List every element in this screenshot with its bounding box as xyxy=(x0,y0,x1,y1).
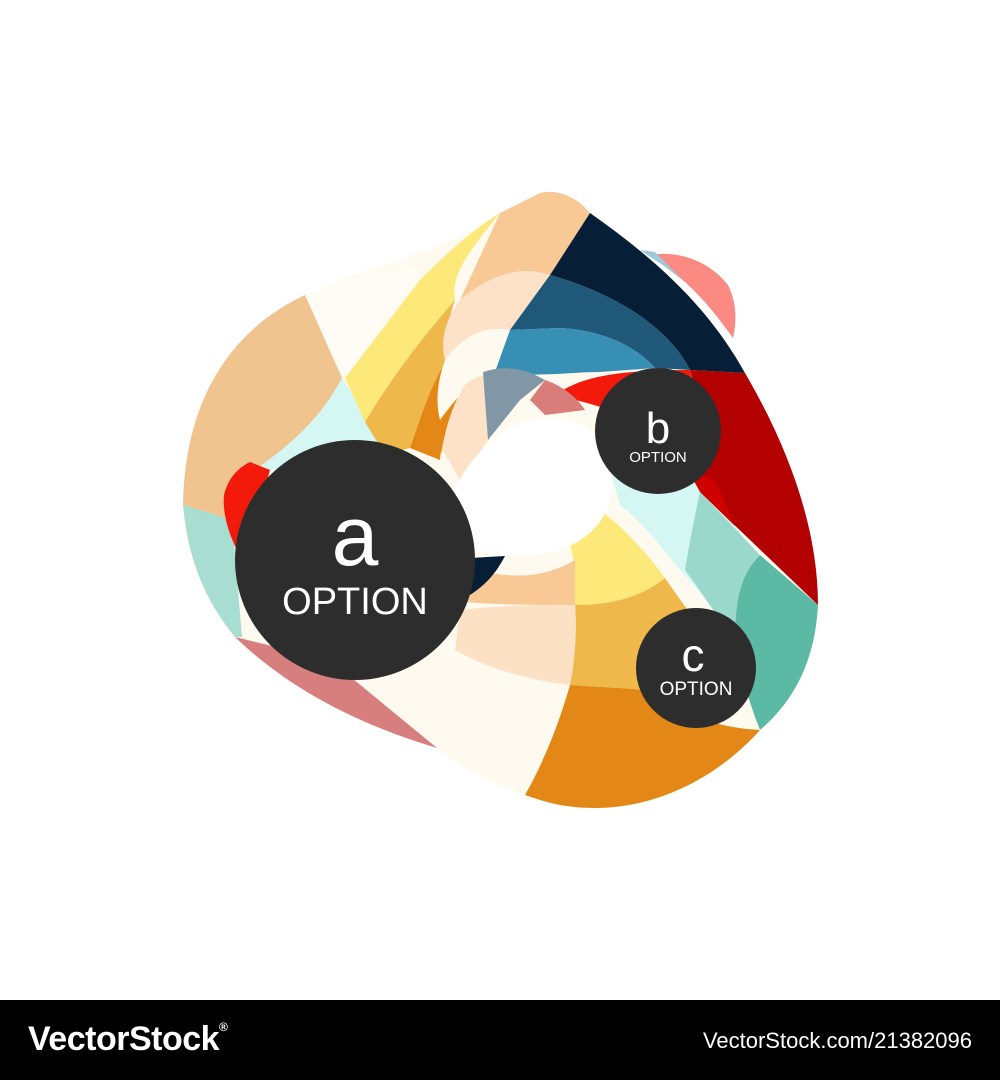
ring shape with colored segments xyxy=(183,192,818,808)
option a circle xyxy=(235,440,475,680)
option a circle: OPTION xyxy=(282,581,428,623)
option b circle: OPTION xyxy=(629,449,687,466)
footer bar xyxy=(0,1000,1000,1080)
option c circle: c xyxy=(682,629,704,681)
option a circle: a xyxy=(332,489,379,583)
option c circle xyxy=(636,608,756,728)
option b circle xyxy=(595,368,721,494)
option b circle: b xyxy=(646,404,670,453)
footer brand: VectorStock® xyxy=(28,1020,227,1058)
option c circle: OPTION xyxy=(660,679,732,700)
center hole xyxy=(451,418,612,556)
footer url: VectorStock.com/21382096 xyxy=(703,1028,972,1053)
